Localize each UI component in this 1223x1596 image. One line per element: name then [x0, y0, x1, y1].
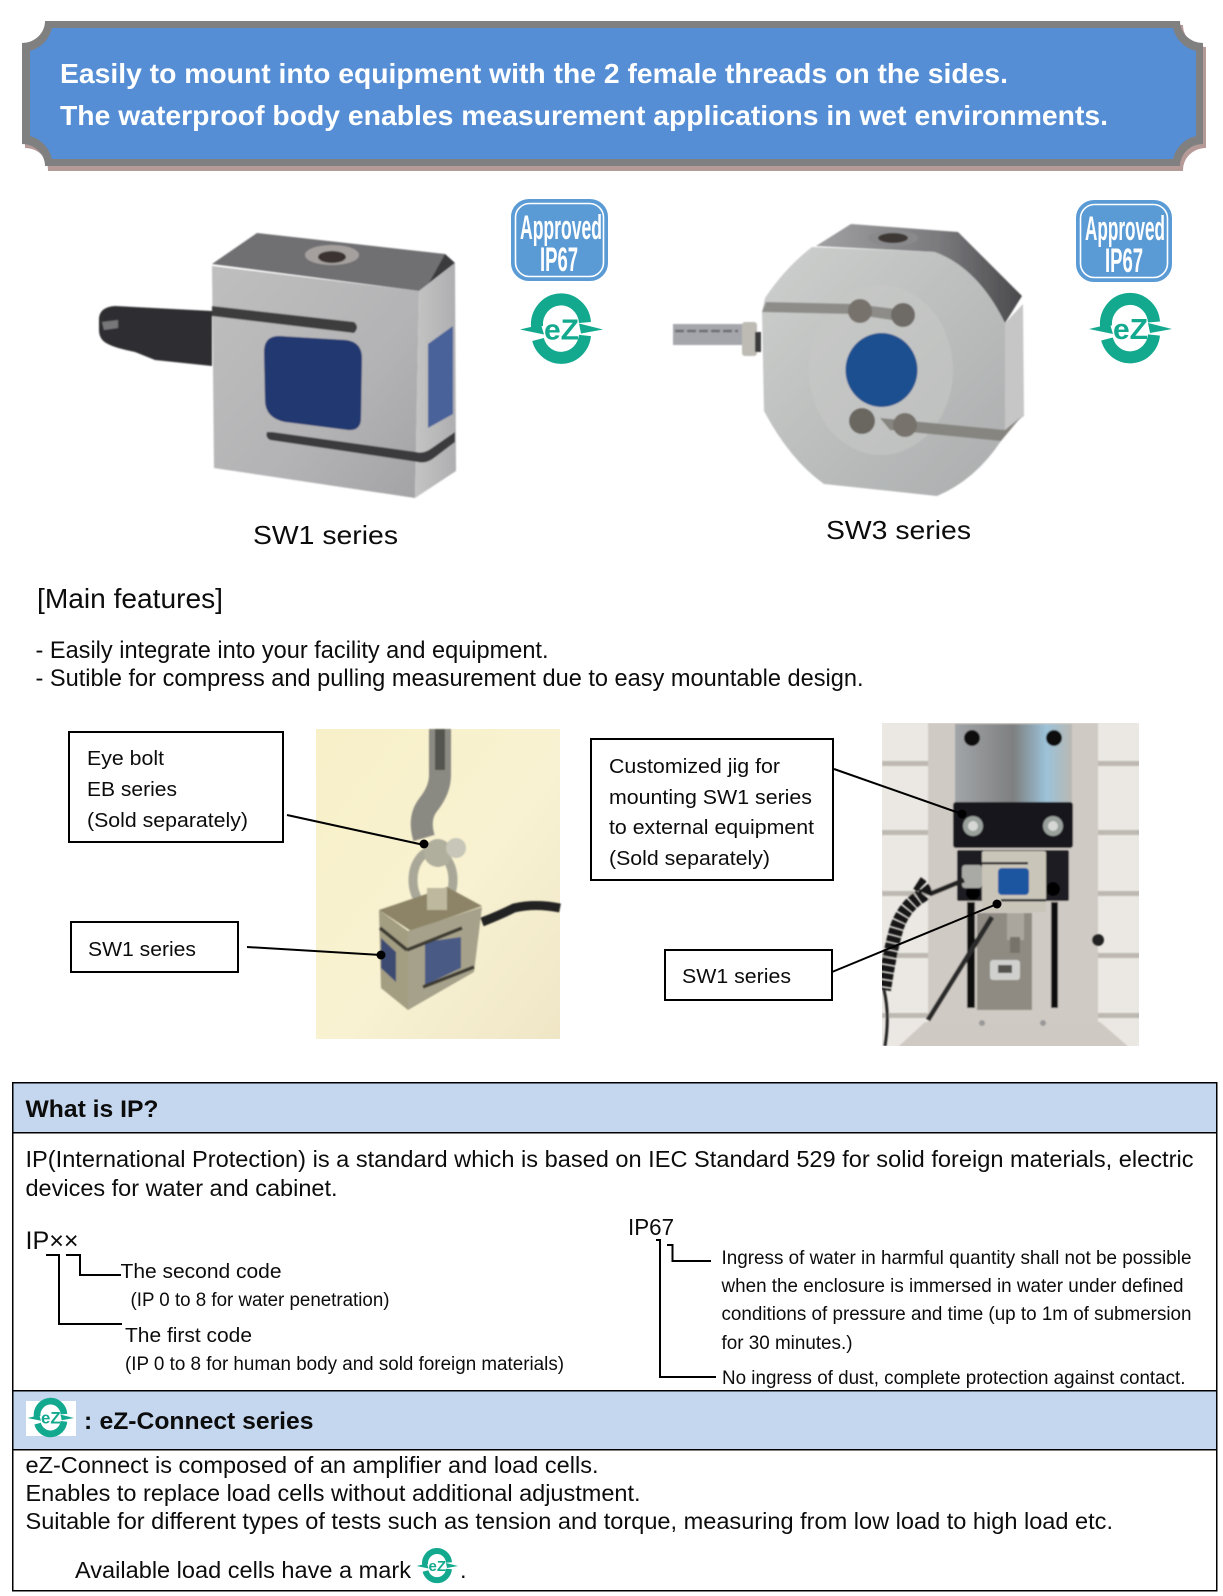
callout: SW1 series (left): [71, 922, 238, 972]
callout: eye bolt: Eye bolt: [87, 747, 164, 770]
arrow: SW1 leader (right): [832, 900, 1002, 972]
badge: Approved IP67 (SW3): IP67: [1105, 242, 1143, 280]
icon: eZ logo (SW3): [1089, 299, 1172, 357]
diagram: IP67 code: No ingress of dust, complete protection against contact.: [722, 1367, 1186, 1389]
text: available load cells mark: Available load cells have a mark: [75, 1557, 411, 1583]
badge: Approved IP67 (SW3): [1077, 201, 1171, 281]
banner: headline: [22, 21, 1206, 171]
callout: customized jig: Customized jig for: [609, 755, 780, 778]
header: What is IP: What is IP?: [26, 1096, 158, 1123]
callout: customized jig: (Sold separately): [609, 847, 770, 870]
text: feature list: [36, 637, 864, 692]
diagram: IP67 code: [628, 1214, 1192, 1389]
diagram: IPxx code: The second code: [120, 1260, 282, 1283]
photo: SW3 load cell: [673, 224, 1024, 496]
text: eZ-Connect description: Enables to replace load cells without additional adjustment.: [26, 1480, 640, 1506]
text: eZ-Connect description: eZ-Connect is composed of an amplifier and load cells.: [26, 1452, 598, 1478]
text: available load cells mark: [75, 1551, 467, 1583]
callout: SW1 series (left): SW1 series: [88, 938, 196, 961]
text: eZ-Connect description: [26, 1452, 1113, 1534]
text: available load cells mark: .: [460, 1557, 467, 1583]
callout: customized jig: to external equipment: [609, 816, 814, 839]
photo: SW1 on customized jig: [882, 723, 1141, 1048]
caption: SW1 series: SW1 series: [253, 520, 398, 550]
text: IP definition: [26, 1146, 1194, 1201]
diagram: IP67 code: for 30 minutes.): [722, 1332, 852, 1354]
callout: customized jig: mounting SW1 series: [609, 786, 812, 809]
header: eZ-Connect series: eZ: [41, 1410, 61, 1428]
callout: SW1 series (right): SW1 series: [682, 965, 791, 988]
photo: SW1 load cell: [99, 233, 456, 498]
icon: eZ logo (SW1): [520, 299, 603, 358]
diagram: IPxx code: [26, 1227, 564, 1375]
badge: Approved IP67 (SW1): Approved: [520, 209, 602, 247]
badge: Approved IP67 (SW1): IP67: [540, 241, 578, 279]
diagram: IP67 code: conditions of pressure and time (up to 1m of submersion: [722, 1303, 1192, 1325]
banner: headline: Easily to mount into equipment with the 2 female threads on the sides.: [60, 58, 1008, 89]
callout: eye bolt: [69, 732, 283, 842]
panel: what is IP: [13, 1083, 1216, 1389]
text: eZ-Connect description: Suitable for different types of tests such as tension and torque, measuring from low load to high load etc.: [26, 1508, 1113, 1534]
caption: SW3 series: SW3 series: [826, 515, 971, 545]
diagram: IP67 code: Ingress of water in harmful quantity shall not be possible: [722, 1247, 1192, 1269]
callout: SW1 series (right): [665, 950, 832, 1000]
photo: eye bolt on SW1: [316, 729, 560, 1039]
text: available load cells mark: eZ: [428, 1559, 446, 1575]
badge: Approved IP67 (SW1): [512, 200, 607, 280]
header: eZ-Connect series: :: [84, 1408, 92, 1435]
heading: main features: [Main features]: [37, 583, 223, 614]
diagram: IPxx code: (IP 0 to 8 for human body and sold foreign materials): [125, 1354, 564, 1375]
header: What is IP: [13, 1083, 1216, 1133]
text: IP definition: IP(International Protection) is a standard which is based on IEC Standard 529 for solid foreign materials, electric: [26, 1146, 1194, 1172]
icon: eZ logo (SW1): eZ: [544, 314, 579, 346]
callout: eye bolt: (Sold separately): [87, 809, 248, 832]
text: feature list: - Easily integrate into your facility and equipment.: [36, 637, 548, 664]
diagram: IP67 code: IP67: [628, 1214, 674, 1240]
icon: eZ logo (SW3): eZ: [1113, 314, 1148, 346]
banner: headline: The waterproof body enables measurement applications in wet environments.: [60, 100, 1108, 131]
header: eZ-Connect series: eZ-Connect series: [100, 1408, 314, 1435]
arrow: jig leader: [834, 769, 966, 818]
callout: eye bolt: EB series: [87, 778, 177, 801]
text: feature list: - Sutible for compress and pulling measurement due to easy mountable design.: [36, 665, 864, 692]
arrow: eye bolt leader: [287, 815, 428, 848]
diagram: IPxx code: (IP 0 to 8 for water penetration): [130, 1290, 390, 1311]
callout: customized jig: [591, 739, 833, 880]
arrow: SW1 leader (left): [247, 947, 386, 960]
header: eZ-Connect series: [13, 1391, 1216, 1450]
panel: eZ-Connect series: [13, 1391, 1216, 1583]
diagram: IPxx code: The first code: [125, 1324, 252, 1347]
diagram: IP67 code: when the enclosure is immersed in water under defined: [721, 1275, 1184, 1297]
diagram: IPxx code: IP××: [26, 1227, 78, 1255]
text: IP definition: devices for water and cabinet.: [26, 1175, 338, 1201]
